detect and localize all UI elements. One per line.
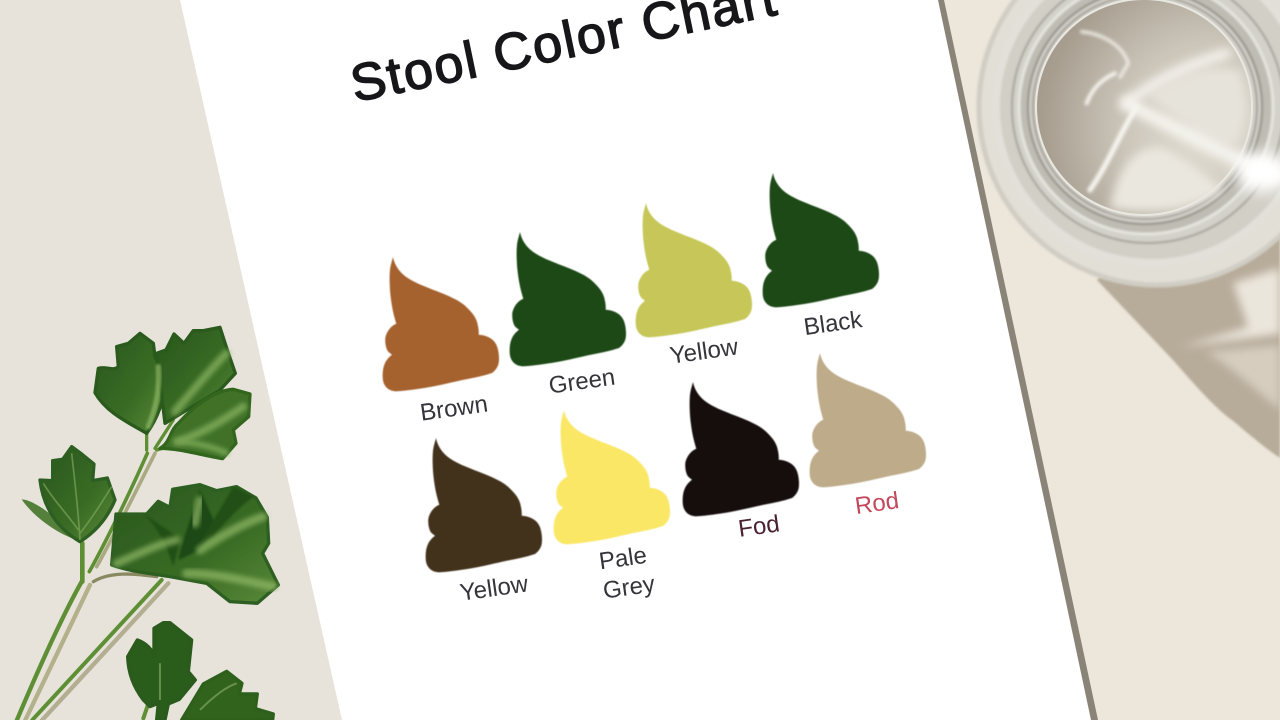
swatch: dark brown <box>426 438 542 572</box>
label: Pale Grey <box>597 542 657 605</box>
paper sheet <box>180 0 1098 720</box>
top leaf cluster <box>95 327 250 459</box>
light flare <box>1236 152 1280 192</box>
stems <box>17 420 173 720</box>
swatch: yellow-green <box>636 203 752 337</box>
swatch: green <box>510 232 626 366</box>
glass of water <box>977 0 1280 287</box>
label: Rod: Rod <box>853 487 901 520</box>
shadow of glass <box>1097 225 1280 458</box>
background: right tabletop <box>930 0 1280 720</box>
glass interior with caustics <box>1036 0 1280 215</box>
label: Brown: Brown <box>418 390 490 427</box>
label: Fod: Fod <box>737 510 781 543</box>
swatch: dark green <box>763 173 879 307</box>
left leaf cluster <box>22 447 115 542</box>
parsley sprig <box>17 327 278 720</box>
swatch: brown <box>383 257 499 391</box>
bottom leaf cluster <box>128 623 273 720</box>
swatch: beige <box>810 353 926 487</box>
label: Green: Green <box>547 364 617 400</box>
swatch: bright yellow <box>554 410 670 544</box>
label: Pale Grey: Grey <box>601 571 657 605</box>
swatch: black <box>683 382 799 516</box>
label: Pale Grey: Pale <box>597 542 649 575</box>
right large leaf cluster <box>112 485 278 603</box>
label: Yellow: Yellow <box>668 333 740 370</box>
label: Black: Black <box>802 306 865 341</box>
label: Yellow (lower): Yellow <box>458 570 530 607</box>
